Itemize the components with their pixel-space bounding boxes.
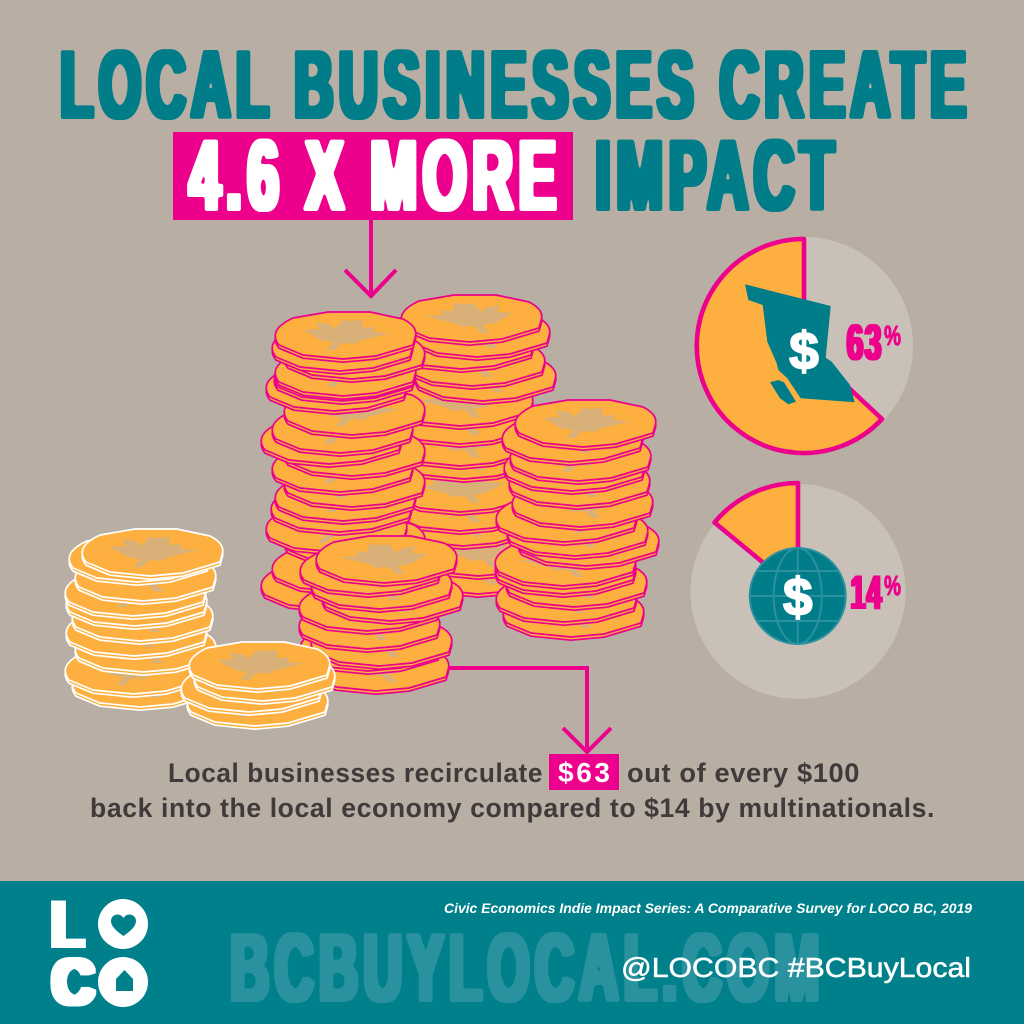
arrow: from headline down to coins <box>345 220 396 296</box>
logo: loco: C <box>52 946 94 1018</box>
body text <box>90 754 935 823</box>
dollar sign: $ <box>783 568 812 627</box>
footer band <box>0 881 1024 1024</box>
coin stack: white left <box>65 529 223 710</box>
percentage label: 63%: % <box>884 320 901 351</box>
pie wedge: 14 percent <box>714 483 798 592</box>
percentage label: 63%: 63 <box>847 314 883 370</box>
icon: globe <box>750 548 846 644</box>
coin stack: white small <box>181 642 335 729</box>
pie wedge: 63 percent <box>697 239 882 453</box>
pie chart: 14% multinational <box>690 483 906 699</box>
highlighted title box: 4.6 x more: 4.6 X MORE <box>189 120 562 230</box>
logo: loco: L <box>51 887 84 961</box>
percentage label: 14%: % <box>884 570 901 601</box>
pie chart: 63% local <box>695 237 913 455</box>
body line 1: Local businesses recirculate <box>168 758 543 788</box>
percentage label: 14%: 14 <box>851 566 883 618</box>
coin stack: tall left <box>261 312 425 612</box>
icon: british columbia map <box>745 284 855 404</box>
body line 1 continued: out of every $100 <box>627 758 860 788</box>
source citation: Civic Economics Indie Impact Series: A Comparative Survey for LOCO BC, 2019 <box>444 900 972 916</box>
dollar sign: $ <box>789 322 819 381</box>
body line 2: back into the local economy compared to $14 by multinationals. <box>90 793 935 823</box>
title <box>60 32 972 230</box>
coin stack: middle back <box>392 295 556 597</box>
highlighted title box: 4.6 x more <box>173 120 573 230</box>
title word: impact: IMPACT <box>595 120 840 230</box>
highlight: $63 <box>549 754 619 790</box>
social handles: @LOCOBC #BCBuyLocal <box>621 952 971 983</box>
coin stack: front short <box>299 536 463 694</box>
logo: loco <box>51 887 148 1018</box>
coin stack: right <box>495 400 659 640</box>
arrow: from coins to $63 <box>448 668 611 752</box>
highlight: $63: $63 <box>558 757 610 788</box>
